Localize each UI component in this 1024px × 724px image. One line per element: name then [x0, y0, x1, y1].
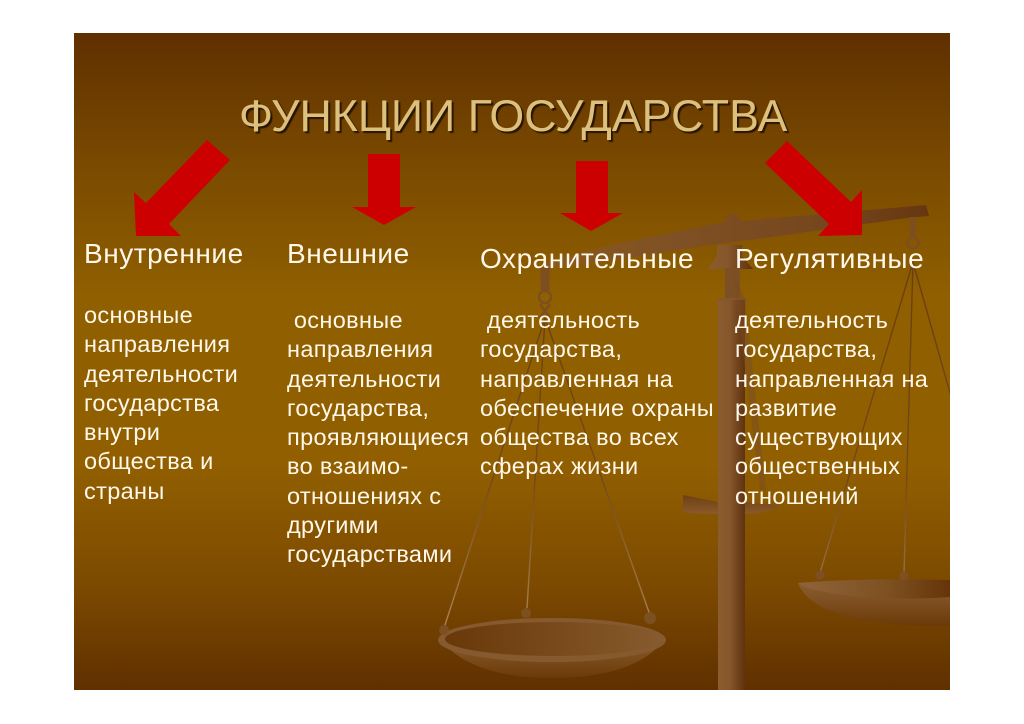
description: основные направления деятельности государства внутри общества и страны: [84, 302, 238, 504]
right pan: [798, 583, 950, 626]
column: regulatory: [735, 243, 928, 509]
strings: [444, 262, 952, 628]
heading: Регулятивные: [735, 243, 924, 274]
slide background: [74, 33, 950, 690]
arrow: to protective functions: [560, 161, 623, 231]
pillar neck: [708, 245, 753, 269]
heading: Охранительные: [480, 243, 694, 274]
arrow: to regulatory functions: [765, 141, 862, 236]
arrow: to external functions: [352, 154, 416, 225]
column: protective: [480, 243, 714, 479]
heading: Внешние: [287, 238, 410, 269]
title: ФУНКЦИИ ГОСУДАРСТВА: [239, 91, 787, 141]
column: internal: [84, 238, 244, 504]
column: external: [287, 238, 469, 567]
pillar: [718, 300, 745, 690]
heading: Внутренние: [84, 238, 244, 269]
left hook: [539, 268, 551, 318]
description: деятельность государства, направленная на обеспечение охраны общества во всех сферах жизни: [480, 307, 714, 479]
left pan: [439, 638, 666, 678]
description: основные направления деятельности государства, проявляющиеся во взаимо- отношениях с другими государствами: [287, 307, 469, 567]
arrow: to internal functions: [134, 140, 230, 236]
scales illustration: [438, 205, 950, 690]
crossbar: [683, 495, 777, 514]
description: деятельность государства, направленная на развитие существующих общественных отношений: [735, 307, 928, 509]
right hook: [908, 217, 918, 248]
beam: [545, 205, 929, 270]
